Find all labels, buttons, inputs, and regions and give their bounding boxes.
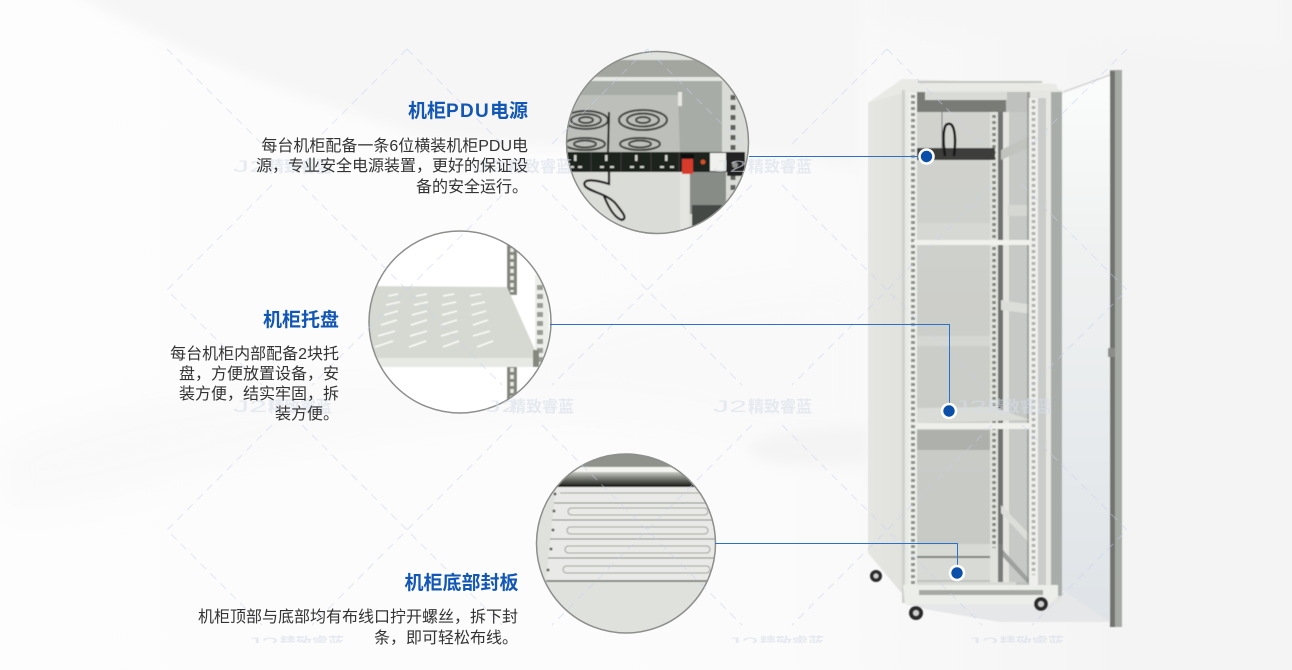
heading: bottom plate: 机柜底部封板 (404, 571, 518, 594)
watermark labels: J2 (713, 157, 747, 176)
watermark labels: J2 (245, 634, 279, 653)
watermark labels: J2 (725, 634, 759, 653)
shelf surface (365, 286, 535, 359)
plate screws (546, 492, 556, 572)
dark lower box (690, 172, 726, 214)
callout lines (550, 156, 958, 573)
description: tray: 装方便，结实牢固，拆 (179, 385, 339, 403)
watermark labels: 精致睿蓝 (760, 634, 824, 653)
watermark labels: 精致睿蓝 (280, 634, 344, 653)
open door (1062, 70, 1122, 627)
cabinet top (868, 79, 1060, 103)
shelf one (914, 240, 1030, 245)
side rail (535, 275, 549, 367)
text block: bottom plate (198, 571, 518, 647)
watermark labels: J2 (965, 634, 999, 653)
description: tray: 装方便。 (275, 405, 339, 423)
circle: tray close-up (365, 228, 555, 418)
cabinet front rails (902, 90, 1062, 603)
plate slots (560, 493, 720, 573)
watermark labels: 精致睿蓝 (510, 397, 574, 416)
watermark labels: 精致睿蓝 (748, 157, 812, 176)
watermark labels: J2 (713, 397, 747, 416)
watermark pattern (167, 49, 1127, 625)
watermark labels: J2 (473, 157, 507, 176)
text block: PDU (256, 100, 528, 196)
watermark labels: J2 (233, 397, 267, 416)
description: PDU: 每台机柜配备一条6位横装机柜PDU电 (261, 137, 528, 155)
shelf two (917, 407, 1030, 429)
text block: tray (170, 308, 339, 423)
marker dots (918, 148, 965, 581)
shelf slots (375, 294, 493, 347)
power cord (584, 172, 624, 220)
watermark labels: 精致睿蓝 (508, 157, 572, 176)
cabinet base (903, 585, 1058, 604)
watermark labels: J2 (953, 397, 987, 416)
circle: bottom plate close-up (536, 453, 716, 634)
watermark labels (233, 157, 1064, 653)
watermark labels: 精致睿蓝 (988, 397, 1052, 416)
watermark labels: 精致睿蓝 (268, 397, 332, 416)
cabinet side panel (868, 84, 905, 597)
watermark labels: J2 (485, 397, 519, 416)
cabinet photo (868, 70, 1122, 627)
cabinet interior (903, 90, 1062, 603)
description: PDU: 备的安全运行。 (416, 178, 528, 196)
description: bottom plate (198, 608, 518, 647)
description: bottom plate: 条，即可轻松布线。 (374, 629, 518, 647)
description: PDU: 源，专业安全电源装置，更好的保证设 (256, 157, 528, 175)
plate seams (548, 503, 725, 558)
description: PDU (256, 137, 528, 196)
casters (870, 570, 1048, 620)
PDU strip and cable (917, 110, 995, 160)
watermark labels: 精致睿蓝 (748, 397, 812, 416)
floor shadow (905, 590, 1110, 622)
watermark labels: 精致睿蓝 (1000, 634, 1064, 653)
PDU bar (560, 152, 732, 172)
fan vents (564, 110, 667, 150)
description: bottom plate: 机柜顶部与底部均有布线口拧开螺丝，拆下封 (198, 608, 518, 626)
circle: PDU close-up (566, 50, 750, 234)
heading: PDU: 机柜PDU电源 (408, 100, 528, 122)
watermark labels: J2 (233, 157, 267, 176)
heading: tray: 机柜托盘 (263, 308, 339, 331)
watermark labels: 精致睿蓝 (268, 157, 332, 176)
description: tray: 盘，方便放置设备，安 (179, 364, 339, 383)
rack rail (722, 81, 730, 153)
description: tray: 每台机柜内部配备2块托 (170, 345, 339, 363)
description: tray (170, 345, 339, 423)
plate body (546, 487, 725, 581)
